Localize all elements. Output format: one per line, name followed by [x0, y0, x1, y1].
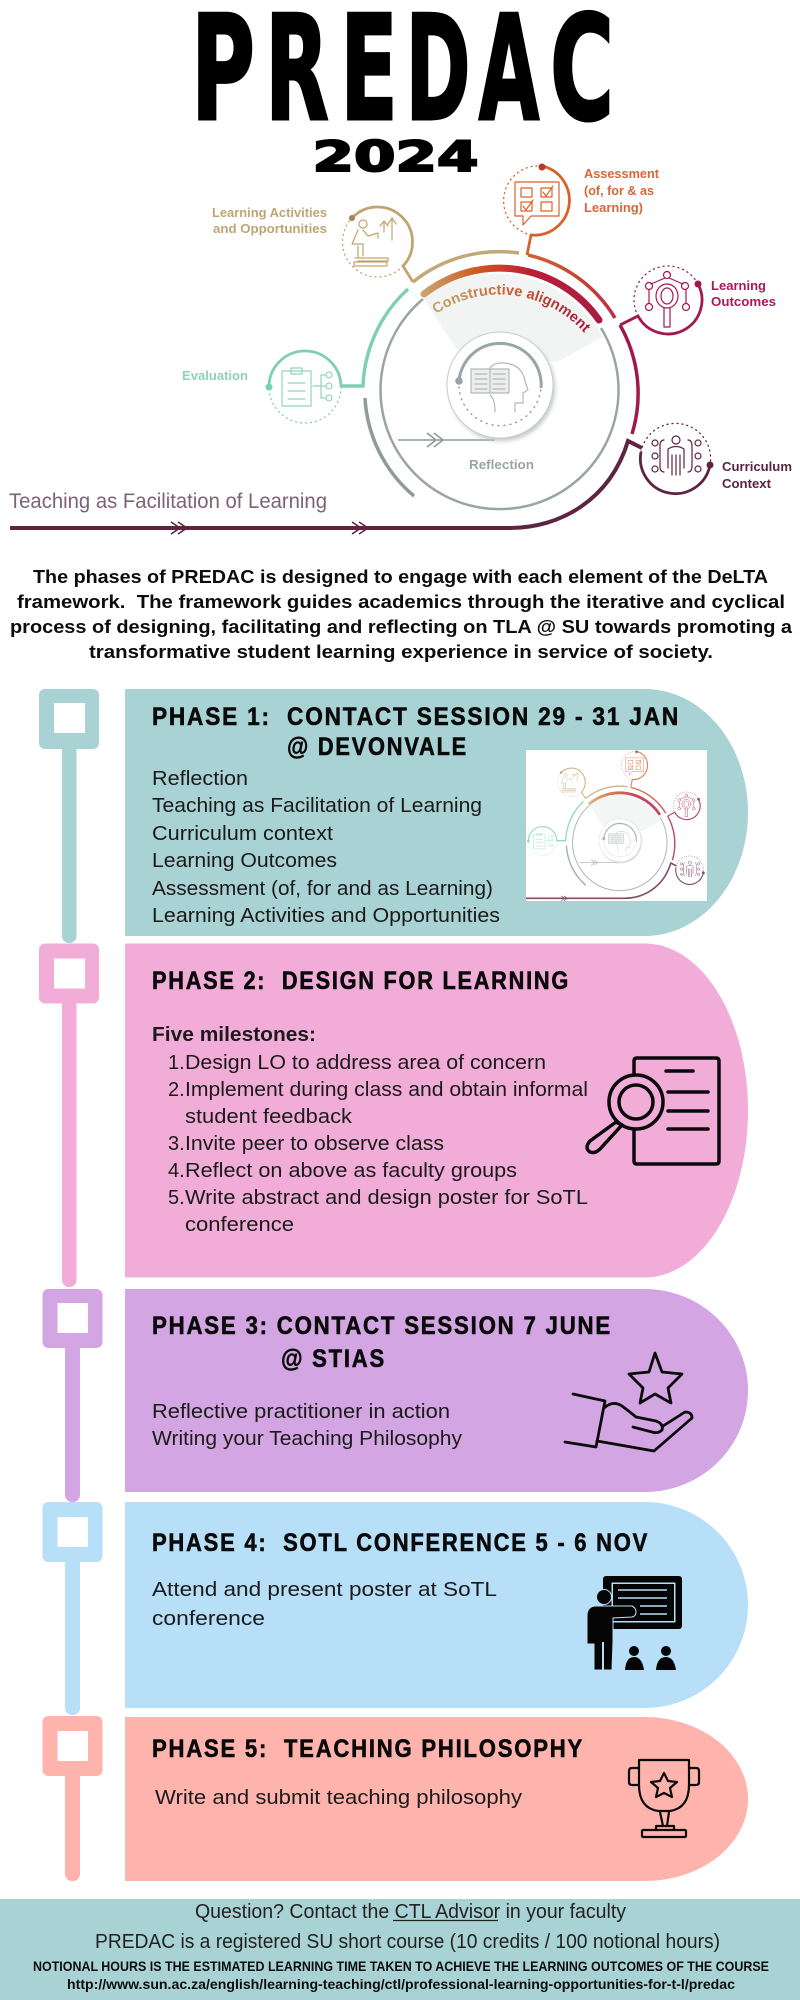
panel: phase 4	[125, 1502, 748, 1708]
subtitle: 2024: 2024	[313, 133, 478, 182]
panel: phase 5	[125, 1717, 748, 1881]
label: constructive alignment: Constructive alignment	[432, 284, 590, 333]
icon: learning outcomes	[646, 272, 690, 327]
label: learning activities: Learning Activities	[212, 206, 327, 220]
panel: phase 1	[125, 689, 748, 936]
milestones list: conference	[185, 1214, 294, 1236]
label: learning outcomes	[711, 279, 776, 309]
phase 4 body text	[152, 1579, 497, 1630]
heading: phase 1: PHASE 1: CONTACT SESSION 29 - 31 JAN	[152, 703, 680, 731]
panel: phase 3	[125, 1289, 748, 1492]
reflection arrow	[398, 433, 495, 447]
milestones list: Implement during class and obtain informal	[185, 1079, 588, 1101]
label: learning activities: and Opportunities	[213, 222, 327, 236]
milestones list: Invite peer to observe class	[185, 1133, 444, 1155]
milestones list: 2.	[168, 1079, 185, 1101]
heading: phase 4: PHASE 4: SOTL CONFERENCE 5 - 6 NOV	[152, 1529, 649, 1557]
phase 4 timeline node	[42, 1502, 102, 1715]
footer band	[0, 1899, 800, 2000]
icon: presenter with audience	[587, 1576, 682, 1670]
milestones list: student feedback	[185, 1106, 353, 1128]
label: assessment: (of, for & as	[584, 184, 654, 198]
phase 3 timeline node	[42, 1289, 102, 1502]
phase 1 topics list: Curriculum context	[152, 823, 333, 845]
phase 1 topics list: Assessment (of, for and as Learning)	[152, 878, 493, 900]
label: teaching as facilitation of learning: Teaching as Facilitation of Learning	[9, 490, 327, 513]
label: curriculum context: Curriculum	[722, 460, 792, 474]
panel: phase 2	[125, 944, 748, 1278]
heading: phase 3: PHASE 3: CONTACT SESSION 7 JUNE	[152, 1312, 612, 1340]
footer: course registration line: PREDAC is a registered SU short course (10 credits / 100 notional hours)	[95, 1931, 720, 1953]
phase 5 timeline node	[42, 1716, 102, 1881]
icon: hand holding star	[565, 1353, 692, 1451]
intro paragraph: The phases of PREDAC is designed to engage with each element of the DeLTA	[33, 567, 768, 587]
phase 4 body text: conference	[152, 1608, 265, 1630]
intro paragraph	[10, 567, 793, 662]
curriculum ring	[640, 452, 710, 494]
phase 1 topics list: Reflection	[152, 768, 248, 790]
label: evaluation: Evaluation	[182, 369, 248, 383]
footer: contact line: Question? Contact the CTL Advisor in your faculty	[195, 1901, 626, 1923]
phase 1 timeline node	[39, 689, 99, 943]
phase 2 timeline node	[39, 944, 99, 1287]
label: assessment	[584, 167, 660, 215]
heading: phase 1: @ DEVONVALE	[287, 733, 468, 761]
activities ring	[352, 207, 413, 282]
label: reflection: Reflection	[469, 458, 534, 472]
heading: phase 3: @ STIAS	[281, 1345, 386, 1373]
phase 1 topics list	[152, 768, 500, 927]
milestones list	[168, 1052, 588, 1236]
intro paragraph: transformative student learning experience in service of society.	[89, 642, 713, 662]
milestones list: Design LO to address area of concern	[185, 1052, 546, 1074]
label: learning activities	[212, 206, 327, 236]
intro paragraph: process of designing, facilitating and reflecting on TLA @ SU towards promoting a	[10, 617, 793, 637]
phase 1 topics list: Teaching as Facilitation of Learning	[152, 795, 482, 817]
icon: curriculum context	[652, 436, 701, 475]
phase 3 body text: Writing your Teaching Philosophy	[152, 1428, 462, 1450]
heading: phase 3	[152, 1312, 612, 1373]
label: assessment: Learning)	[584, 201, 643, 215]
phase 3 body text	[152, 1401, 462, 1450]
icon: assessment checklist	[515, 182, 559, 225]
icon: document with magnifier	[587, 1058, 719, 1164]
milestones list: 3.	[168, 1133, 185, 1155]
icon: learning activities	[352, 218, 396, 266]
heading: phase 5: PHASE 5: TEACHING PHILOSOPHY	[152, 1735, 584, 1763]
label: curriculum context: Context	[722, 477, 772, 491]
intro paragraph: framework. The framework guides academics through the iterative and cyclical	[17, 592, 785, 612]
milestones list: Reflect on above as faculty groups	[185, 1160, 517, 1182]
milestones list: 1.	[168, 1052, 185, 1074]
arrows on facilitation line	[171, 522, 368, 534]
title: PREDAC	[191, 0, 614, 154]
footer: url: http://www.sun.ac.za/english/learning-teaching/ctl/professional-learning-opportunities-for-t-l/predac	[67, 1976, 735, 1992]
label: learning outcomes: Outcomes	[711, 295, 776, 309]
icon: trophy	[629, 1760, 699, 1837]
milestones list: 4.	[168, 1160, 185, 1182]
phase 5 body text: Write and submit teaching philosophy	[155, 1787, 522, 1809]
heading: phase 2: PHASE 2: DESIGN FOR LEARNING	[152, 967, 570, 995]
phase 1 topics list: Learning Outcomes	[152, 850, 337, 872]
diagram: DeLTA framework	[9, 164, 792, 535]
label: curriculum context	[722, 460, 792, 491]
outcomes ring	[620, 284, 702, 334]
thumbnail: framework diagram	[526, 750, 707, 901]
evaluation ring	[269, 351, 341, 387]
icon: evaluation clipboard	[282, 368, 332, 406]
phase 3 body text: Reflective practitioner in action	[152, 1401, 450, 1423]
phase 1 topics list: Learning Activities and Opportunities	[152, 905, 500, 927]
centre head medallion	[447, 332, 555, 441]
assessment ring	[527, 166, 569, 255]
label: assessment: Assessment	[584, 167, 660, 181]
subheading: five milestones: Five milestones:	[152, 1024, 316, 1046]
label: learning outcomes: Learning	[711, 279, 766, 293]
diagram graphics: rings, phase icons	[10, 164, 714, 534]
milestones list: 5.	[168, 1187, 185, 1209]
heading: phase 1	[152, 703, 680, 761]
milestones list: Write abstract and design poster for SoTL	[185, 1187, 588, 1209]
phase 4 body text: Attend and present poster at SoTL	[152, 1579, 497, 1601]
